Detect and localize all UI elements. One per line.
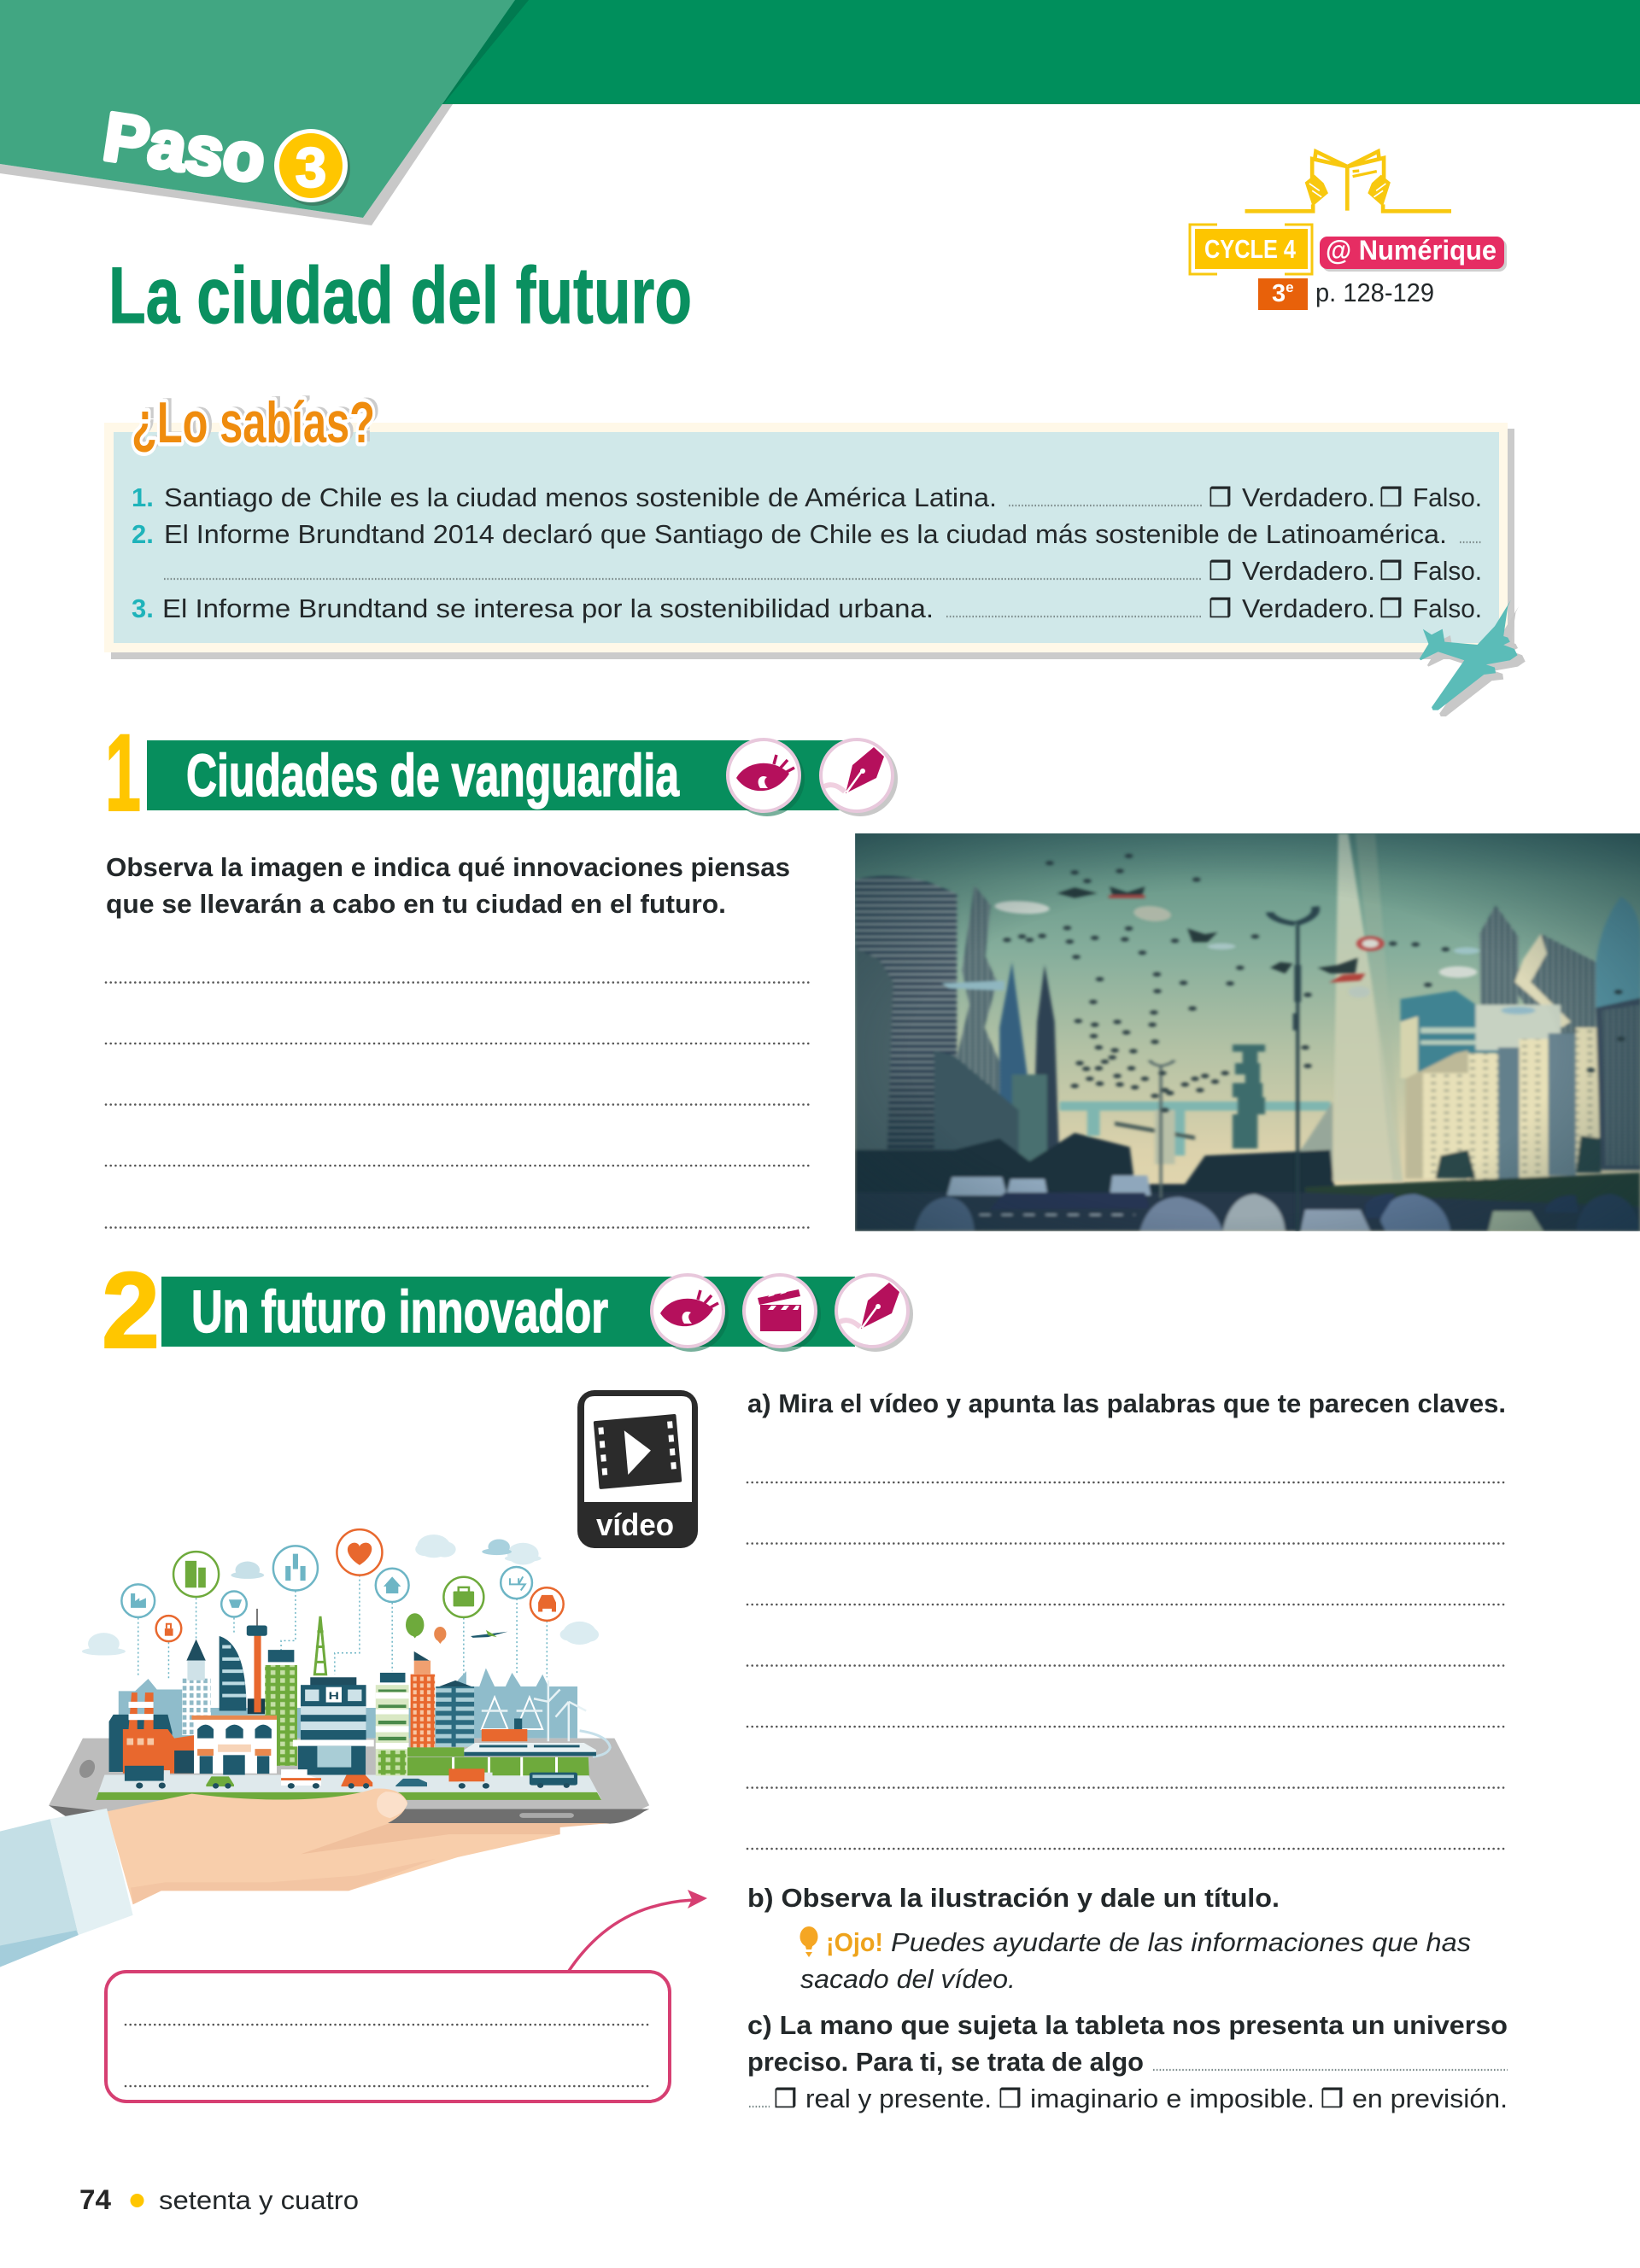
- street and grass: [1305, 1172, 1640, 1207]
- icon: clapperboard: [744, 1275, 821, 1352]
- statement 3: ❒: [1209, 594, 1232, 624]
- right buildings: [1479, 905, 1518, 1010]
- footer: page number: setenta y cuatro: [159, 2185, 359, 2215]
- question c: ❒: [774, 2084, 797, 2114]
- footer: page number: [79, 2184, 359, 2215]
- step label: Paso 3: Paso: [99, 98, 270, 197]
- icon: eye: [652, 1275, 729, 1352]
- question c: [747, 2010, 1508, 2114]
- number 2: 2: [102, 1250, 160, 1371]
- question a: a) Mira el vídeo y apunta las palabras que te parecen claves.: [747, 1388, 1506, 1418]
- header band: [0, 0, 1640, 225]
- page reference: 3: [1272, 280, 1286, 307]
- city buildings: [109, 1609, 596, 1776]
- tip: ¡Ojo!: ¡Ojo!: [826, 1927, 883, 1957]
- badge: CYCLE 4: [1190, 225, 1312, 274]
- flying vehicles: [993, 899, 1051, 915]
- icon: video badge: vídeo: [596, 1507, 674, 1542]
- statement 3: Verdadero.: [1242, 593, 1375, 623]
- instruction: section 1: que se llevarán a cabo en tu ciudad en el futuro.: [106, 889, 726, 919]
- illustration: hand holding tablet with smart city: [0, 1529, 649, 1967]
- question c: preciso. Para ti, se trata de algo: [747, 2047, 1144, 2077]
- footer: page number: 74: [79, 2184, 111, 2215]
- clouds: [82, 1534, 599, 1656]
- box: title answer: [106, 1972, 670, 2101]
- street vehicles: [125, 1766, 577, 1789]
- number 1: 1: [105, 712, 141, 834]
- hand: [107, 1788, 610, 1904]
- gantry and hanging tower: [1060, 1102, 1330, 1155]
- heading: ¿Lo sabías?: ¿Lo sabías?: [136, 388, 379, 453]
- central trees: [855, 1133, 1335, 1195]
- question c: imaginario e imposible.: [1030, 2084, 1315, 2113]
- icon: teal airplane: [1420, 600, 1526, 716]
- statement 2: 2.: [132, 519, 154, 549]
- badge: Numérique: @ Numérique: [1326, 235, 1496, 266]
- statement 1: ❒: [1209, 483, 1232, 513]
- statement 3: ❒: [1379, 594, 1403, 624]
- page reference: [1258, 278, 1434, 310]
- icon: video badge: [577, 1390, 698, 1548]
- store: [194, 1716, 277, 1774]
- statement 1: Falso.: [1413, 482, 1482, 512]
- icon: hands holding open book: [1245, 151, 1451, 211]
- statement 3: [132, 593, 1482, 624]
- step label: Paso 3: 3: [296, 136, 326, 199]
- service icons: [121, 1529, 564, 1641]
- balloons and plane: [406, 1613, 507, 1644]
- statement 2: ❒: [1209, 557, 1232, 587]
- arrow: from box to question b: [569, 1890, 707, 1971]
- statement 1: [132, 482, 1482, 513]
- tablet: [49, 1731, 649, 1824]
- section 2 heading bar: [102, 1250, 913, 1371]
- statement 2: Verdadero.: [1242, 556, 1375, 586]
- tip: ¡Ojo!: sacado del vídeo.: [800, 1964, 1016, 1994]
- section 2 title: Un futuro innovador: [191, 1278, 608, 1345]
- statement 1: Santiago de Chile es la ciudad menos sostenible de América Latina.: [164, 482, 997, 512]
- question c: ❒: [1321, 2084, 1344, 2114]
- page reference: e: [1286, 279, 1294, 295]
- statement 2: El Informe Brundtand 2014 declaró que Santiago de Chile es la ciudad más sostenible de Latinoamérica.: [164, 519, 1447, 549]
- panel: ¿Lo sabías?: [104, 388, 1514, 659]
- statement 3: 3.: [132, 593, 154, 623]
- question c: ❒: [999, 2084, 1022, 2114]
- tip: ¡Ojo!: Puedes ayudarte de las informaciones que has: [891, 1927, 1471, 1957]
- city buildings: H: [329, 1690, 339, 1702]
- icon: fountain pen: [821, 739, 898, 816]
- icon: fountain pen: [836, 1275, 913, 1352]
- statement 1: ❒: [1379, 483, 1403, 513]
- question c: real y presente.: [805, 2084, 992, 2113]
- icon: eye: [728, 739, 805, 816]
- instruction: section 1: Observa la imagen e indica qué innovaciones piensas: [106, 852, 790, 882]
- tip: ¡Ojo!: [800, 1926, 1471, 1994]
- obelisk: [1332, 833, 1403, 1181]
- sleeve and cuff: [0, 1809, 133, 1967]
- instruction: section 1: [106, 852, 790, 919]
- icon glyphs: [131, 1543, 556, 1636]
- vehicles: [947, 1177, 1007, 1195]
- page reference: p. 128-129: [1315, 278, 1434, 307]
- question b: b) Observa la ilustración y dale un título.: [747, 1883, 1280, 1913]
- section 1 title: Ciudades de vanguardia: [186, 742, 680, 809]
- connection lines: [138, 1575, 547, 1681]
- skyline backdrop: [119, 1669, 577, 1739]
- statement 2: [132, 519, 1482, 587]
- answer lines: question a: [747, 1482, 1508, 1849]
- left towers: [855, 876, 957, 1198]
- step label: Paso 3: [99, 98, 350, 206]
- statement 2: ❒: [1379, 557, 1403, 587]
- answer lines: section 1: [106, 982, 809, 1228]
- statement 3: El Informe Brundtand se interesa por la sostenibilidad urbana.: [162, 593, 934, 623]
- heading: ¿Lo sabías?: ¿Lo sabías?: [132, 390, 375, 455]
- statement 3: Falso.: [1413, 593, 1482, 623]
- icon: light bulb: [800, 1926, 818, 1957]
- statement 1: 1.: [132, 482, 154, 512]
- photo: futuristic city: [855, 833, 1640, 1231]
- statement 1: Verdadero.: [1242, 482, 1375, 512]
- title: La ciudad del futuro: [108, 250, 692, 340]
- question c: c) La mano que sujeta la tableta nos presenta un universo: [747, 2010, 1508, 2040]
- street lamps: [1150, 907, 1315, 1231]
- section 1 heading bar: [105, 712, 898, 834]
- question c: en previsión.: [1352, 2084, 1508, 2113]
- statement 2: Falso.: [1413, 556, 1482, 586]
- badge: CYCLE 4: CYCLE 4: [1204, 234, 1297, 264]
